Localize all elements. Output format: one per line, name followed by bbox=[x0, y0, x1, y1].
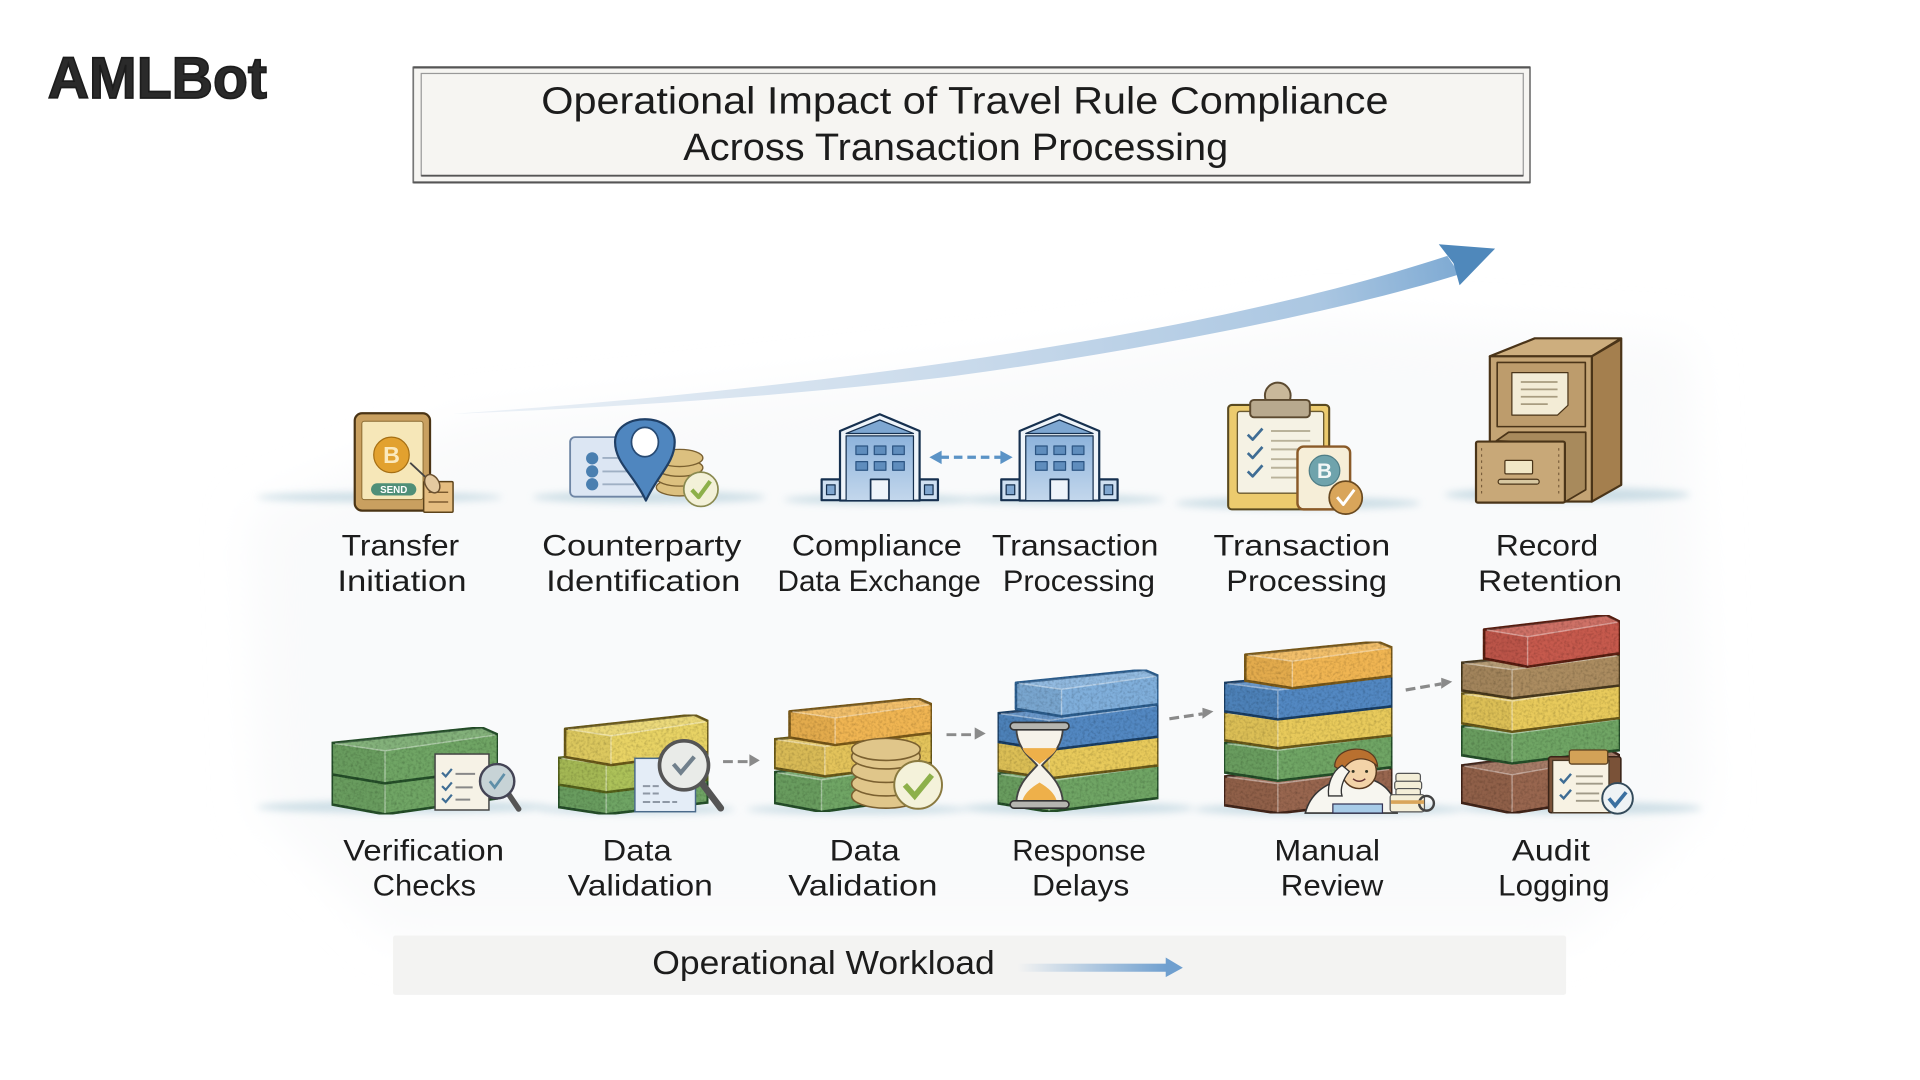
label: Data bbox=[603, 834, 672, 867]
label: Validation bbox=[568, 869, 713, 902]
label: Processing bbox=[1226, 565, 1387, 598]
label bbox=[337, 529, 467, 598]
label: operational workload: Operational Workload bbox=[652, 945, 995, 982]
label: Review bbox=[1281, 869, 1384, 902]
label: Response bbox=[1012, 834, 1146, 867]
label: Verification bbox=[343, 834, 504, 867]
label bbox=[778, 529, 981, 598]
label: Audit bbox=[1512, 834, 1590, 867]
step: Audit Logging bbox=[1461, 615, 1633, 902]
panel: operational workload bar bbox=[393, 936, 1566, 995]
arrow: dashed connector 3 bbox=[1169, 708, 1213, 719]
icon: green blocks with checklist and magnifier bbox=[332, 727, 519, 814]
arrow: data exchange between institutions bbox=[929, 451, 1013, 464]
label bbox=[1213, 529, 1390, 598]
title: Operational Impact of Travel Rule Compliance bbox=[541, 80, 1389, 122]
label bbox=[992, 529, 1158, 598]
step: Compliance Data Exchange bbox=[778, 414, 981, 598]
label: Initiation bbox=[337, 565, 467, 598]
label bbox=[542, 529, 742, 598]
label: Transaction bbox=[1213, 529, 1390, 562]
label: Delays bbox=[1032, 869, 1129, 902]
icon: stacked blocks with overwhelmed reviewer bbox=[1224, 642, 1434, 813]
label bbox=[1478, 529, 1622, 598]
label: Data Exchange bbox=[778, 565, 981, 598]
label bbox=[1498, 834, 1610, 902]
title panel bbox=[413, 67, 1530, 182]
label: Validation bbox=[788, 869, 937, 902]
label bbox=[788, 834, 937, 902]
label: Counterparty bbox=[542, 529, 742, 562]
step: Verification Checks bbox=[332, 727, 519, 902]
label: Processing bbox=[1003, 565, 1155, 598]
step: Transaction Processing (building) bbox=[992, 414, 1158, 598]
label: Checks bbox=[373, 869, 476, 902]
step: Transfer Initiation bbox=[337, 413, 467, 598]
icon: filing cabinet bbox=[1476, 338, 1621, 503]
icon: right institution building bbox=[1001, 414, 1118, 501]
logo: AMLBot bbox=[48, 46, 267, 111]
label bbox=[1274, 834, 1384, 902]
arrow: workload direction bbox=[1018, 958, 1183, 977]
step: Data Validation (coins) bbox=[774, 698, 942, 902]
icon: phone with bitcoin send bbox=[355, 413, 453, 512]
icon: clipboard with phone: B bbox=[1317, 460, 1332, 483]
arrow: dashed connector 1 bbox=[723, 754, 760, 767]
icon: tall block stack with audit clipboard bbox=[1461, 615, 1633, 814]
label: Record bbox=[1496, 529, 1598, 562]
title bbox=[541, 80, 1389, 169]
step: Response Delays bbox=[998, 670, 1158, 902]
label: Retention bbox=[1478, 565, 1622, 598]
label: Transaction bbox=[992, 529, 1158, 562]
icon: location pin with id card and coins bbox=[570, 419, 718, 506]
icon: stacked blocks with document and magnifier bbox=[558, 715, 721, 814]
step: Data Validation (magnifier) bbox=[558, 715, 721, 902]
label: Transfer bbox=[342, 529, 459, 562]
icon: stacked blocks with hourglass bbox=[998, 670, 1158, 812]
label: Compliance bbox=[792, 529, 962, 562]
arrow: dashed connector 4 bbox=[1406, 678, 1452, 690]
step: Transaction Processing (clipboard) bbox=[1213, 383, 1390, 598]
ground wash: top row bbox=[257, 487, 1690, 509]
icon: phone with bitcoin send: SEND bbox=[380, 485, 407, 496]
icon: phone with bitcoin send: B bbox=[383, 442, 400, 468]
icon: clipboard with phone bbox=[1228, 383, 1362, 514]
background wash bbox=[251, 321, 1704, 937]
arrow: rising workload curve bbox=[453, 244, 1495, 414]
icon: left institution building bbox=[822, 414, 938, 501]
arrow: dashed connector 2 bbox=[947, 727, 986, 740]
label: Data bbox=[830, 834, 900, 867]
step: Record Retention bbox=[1476, 338, 1622, 598]
label bbox=[568, 834, 713, 902]
label bbox=[1012, 834, 1146, 902]
step: Counterparty Identification bbox=[542, 419, 742, 598]
label: Identification bbox=[546, 565, 740, 598]
step: Manual Review bbox=[1224, 642, 1434, 902]
ground wash: bottom row bbox=[257, 801, 1702, 816]
label: Manual bbox=[1274, 834, 1380, 867]
title: Across Transaction Processing bbox=[683, 127, 1228, 169]
label: Logging bbox=[1498, 869, 1610, 902]
icon: stacked blocks with coins and check bbox=[774, 698, 942, 812]
label bbox=[343, 834, 504, 902]
